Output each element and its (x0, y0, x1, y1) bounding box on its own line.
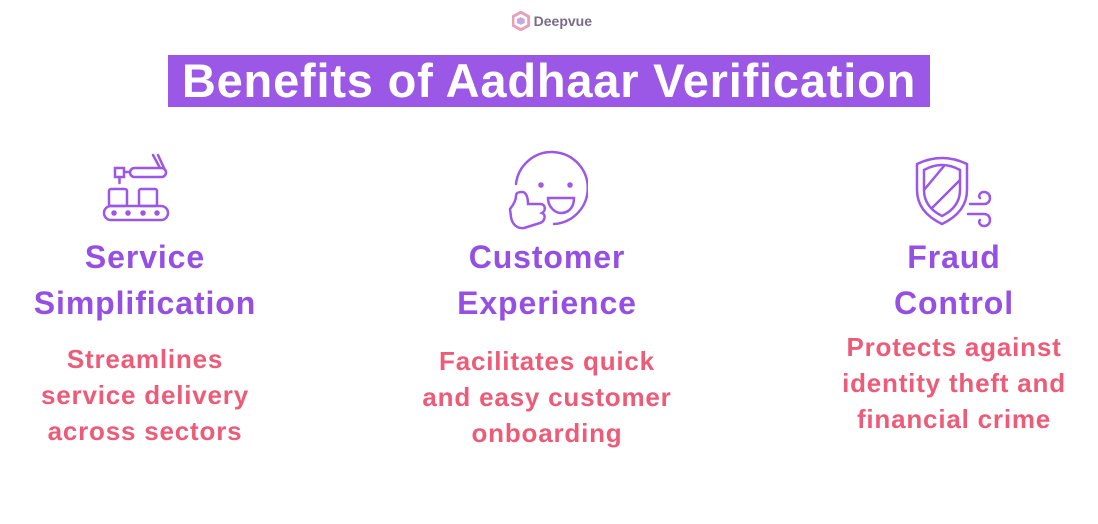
heading: service simplification: Service (85, 239, 205, 275)
column: service simplification (34, 239, 256, 446)
text: fraud description: financial crime (857, 404, 1051, 434)
text: customer description: and easy customer (422, 382, 672, 412)
text: service description: service delivery (41, 380, 249, 410)
text: customer description (422, 346, 672, 448)
heading: customer experience: Customer (469, 239, 625, 275)
logo: Deepvue (534, 13, 592, 29)
text: service description: across sectors (48, 416, 242, 446)
title: Benefits of Aadhaar Verification (182, 54, 916, 107)
heading: service simplification: Simplification (34, 285, 256, 321)
heading: fraud control: Fraud (907, 239, 1001, 275)
text: customer description: onboarding (472, 418, 622, 448)
logo (512, 11, 592, 31)
text: service description (41, 344, 249, 446)
text: fraud description: Protects against (846, 332, 1062, 362)
text: service description: Streamlines (67, 344, 223, 374)
heading: service simplification (34, 239, 256, 321)
icon: conveyor robot (102, 154, 170, 222)
heading: fraud control: Control (894, 285, 1014, 321)
text: customer description: Facilitates quick (439, 346, 655, 376)
heading: customer experience (457, 239, 637, 321)
icon: smiley thumbs up (508, 150, 588, 230)
text: fraud description: identity theft and (842, 368, 1066, 398)
column: fraud control (842, 239, 1066, 434)
heading: customer experience: Experience (457, 285, 637, 321)
text: fraud description (842, 332, 1066, 434)
heading: fraud control (894, 239, 1014, 321)
column: customer experience (422, 239, 672, 448)
icon: shield wind (916, 156, 992, 228)
